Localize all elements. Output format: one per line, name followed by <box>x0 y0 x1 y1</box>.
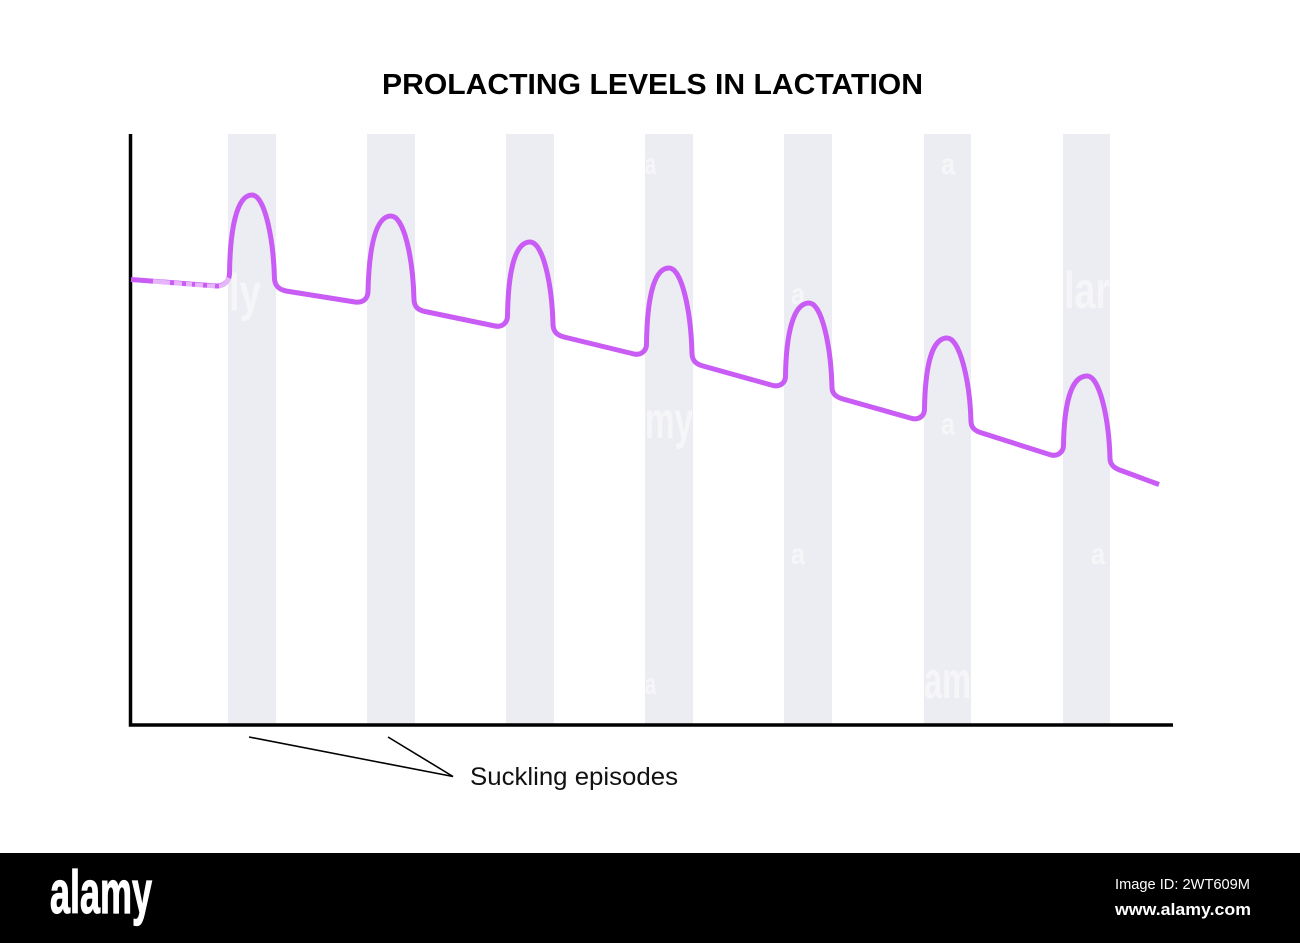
faint watermark fragments: a <box>645 668 656 701</box>
axes <box>130 134 1173 725</box>
faint watermark fragments: a <box>1091 538 1105 571</box>
faint watermark fragments: a <box>645 148 656 181</box>
faint watermark fragments: a <box>791 538 805 571</box>
faint watermark fragments <box>229 148 1110 710</box>
title: PROLACTING LEVELS IN LACTATION <box>382 69 923 101</box>
footer logo: alamy <box>50 859 152 926</box>
faint watermark fragments: my <box>645 392 693 450</box>
callout lines <box>249 737 453 776</box>
faint watermark fragments: a <box>941 148 955 181</box>
faint watermark fragments: a <box>941 408 955 441</box>
suckling episode bands <box>228 134 1110 724</box>
prolactin curve <box>131 195 1159 484</box>
faint watermark fragments: ly <box>229 264 261 322</box>
footer bar <box>0 853 1300 943</box>
callout: suckling episodes <box>249 737 678 791</box>
chart: prolactin levels <box>130 134 1173 725</box>
faint watermark fragments: lar <box>1064 262 1110 320</box>
image id: Image ID: 2WT609M <box>1115 876 1250 893</box>
watermark over curve start <box>153 278 229 286</box>
faint watermark fragments: a <box>791 278 805 311</box>
faint watermark fragments: am <box>924 652 971 710</box>
callout label: Suckling episodes <box>470 763 678 791</box>
website: www.alamy.com <box>1114 900 1251 919</box>
